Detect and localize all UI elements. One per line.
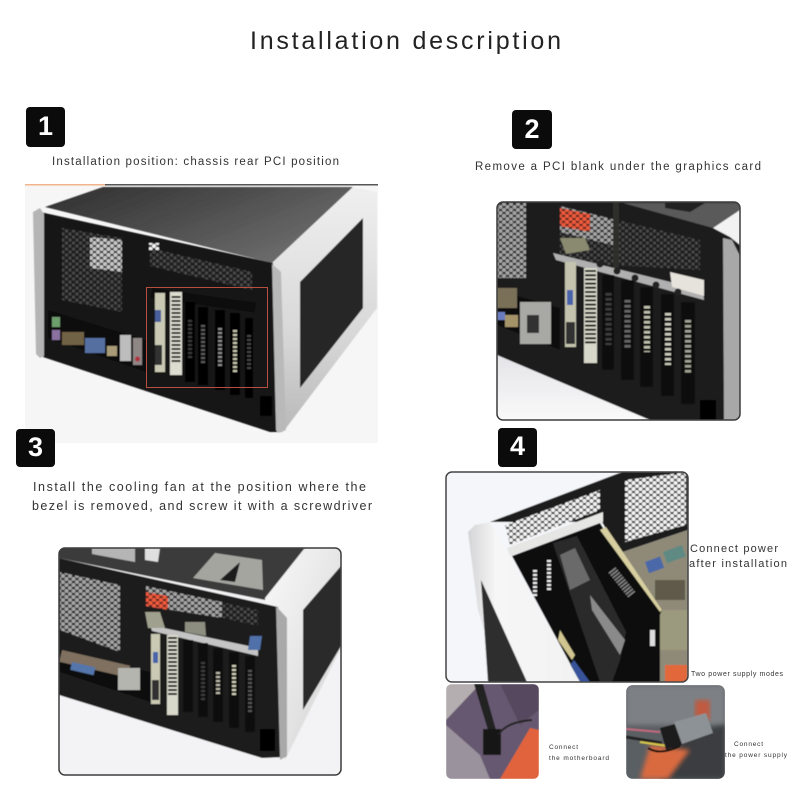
step 2 number badge: 2 [524,114,540,144]
IO panel [59,650,150,702]
step 3 number badge: 3 [28,432,43,462]
orange memory slot [500,728,539,779]
step 3 caption: bezel is removed, and screw it with a screwdriver [32,499,372,513]
floor [497,355,650,420]
step 2 caption: Remove a PCI blank under the graphics card [475,161,761,173]
step 1 number badge [26,107,65,147]
cables [626,729,680,752]
step 4 number badge: 4 [510,431,525,461]
PCI slot brackets [151,288,256,398]
step 3 caption [32,480,372,513]
step 3 caption: Install the cooling fan at the position where the [33,480,366,494]
IO panel [497,288,560,350]
chassis white side [265,549,341,760]
red highlight rectangle [146,288,268,388]
rear ventilation holes [62,228,252,312]
step 2 number badge [512,110,552,149]
step 3 number badge [16,429,55,467]
panel: step 1 photo, chassis rear PCI position [25,184,378,443]
chassis upper right corner [623,203,740,420]
caption: connect the power supply [725,741,788,759]
PCI brackets and slots [553,238,704,404]
caption: connect the motherboard: Connect [549,744,578,751]
chassis rear face [59,558,286,758]
chassis interior with fan [59,548,305,600]
panel: step 4 photo, view of installed fan from above [446,472,688,682]
caption: connect the motherboard [549,744,609,762]
PCI interior and fan [512,523,662,682]
step 4 number badge [498,428,537,467]
panel: step 2 photo, removing a PCI blank [497,202,740,420]
black connector and cable [474,684,532,755]
power socket [700,400,716,420]
step 1 number badge: 1 [38,111,53,141]
power socket [260,729,275,751]
connect power note: after installation [689,558,787,570]
photo: motherboard connector [446,684,539,779]
chassis top surface [45,187,353,263]
motherboard [622,530,688,682]
connect power note: Connect power [690,543,778,555]
step 1 caption: Installation position: chassis rear PCI position [52,156,339,168]
connect power note [689,543,787,570]
white chassis corner [468,522,580,682]
chassis rear face [40,212,282,432]
caption: connect the motherboard: the motherboard [549,755,609,762]
power socket [260,396,272,416]
panel: step 3 photo, cooling fan installed [59,548,341,775]
photo: power supply connector [626,685,725,779]
ventilation holes [497,203,700,278]
IO panel [48,310,146,372]
chassis white side [272,187,377,432]
caption: connect the power supply: Connect [734,741,763,748]
two power supply modes note: Two power supply modes [691,671,784,678]
ventilation holes [60,572,258,652]
grey plug [660,713,713,750]
title: Installation description [250,27,561,55]
caption: connect the power supply: the power supply [725,752,788,759]
PCI brackets and slots [145,612,262,732]
perforated rear panel [490,472,688,556]
screwdriver [613,202,619,272]
